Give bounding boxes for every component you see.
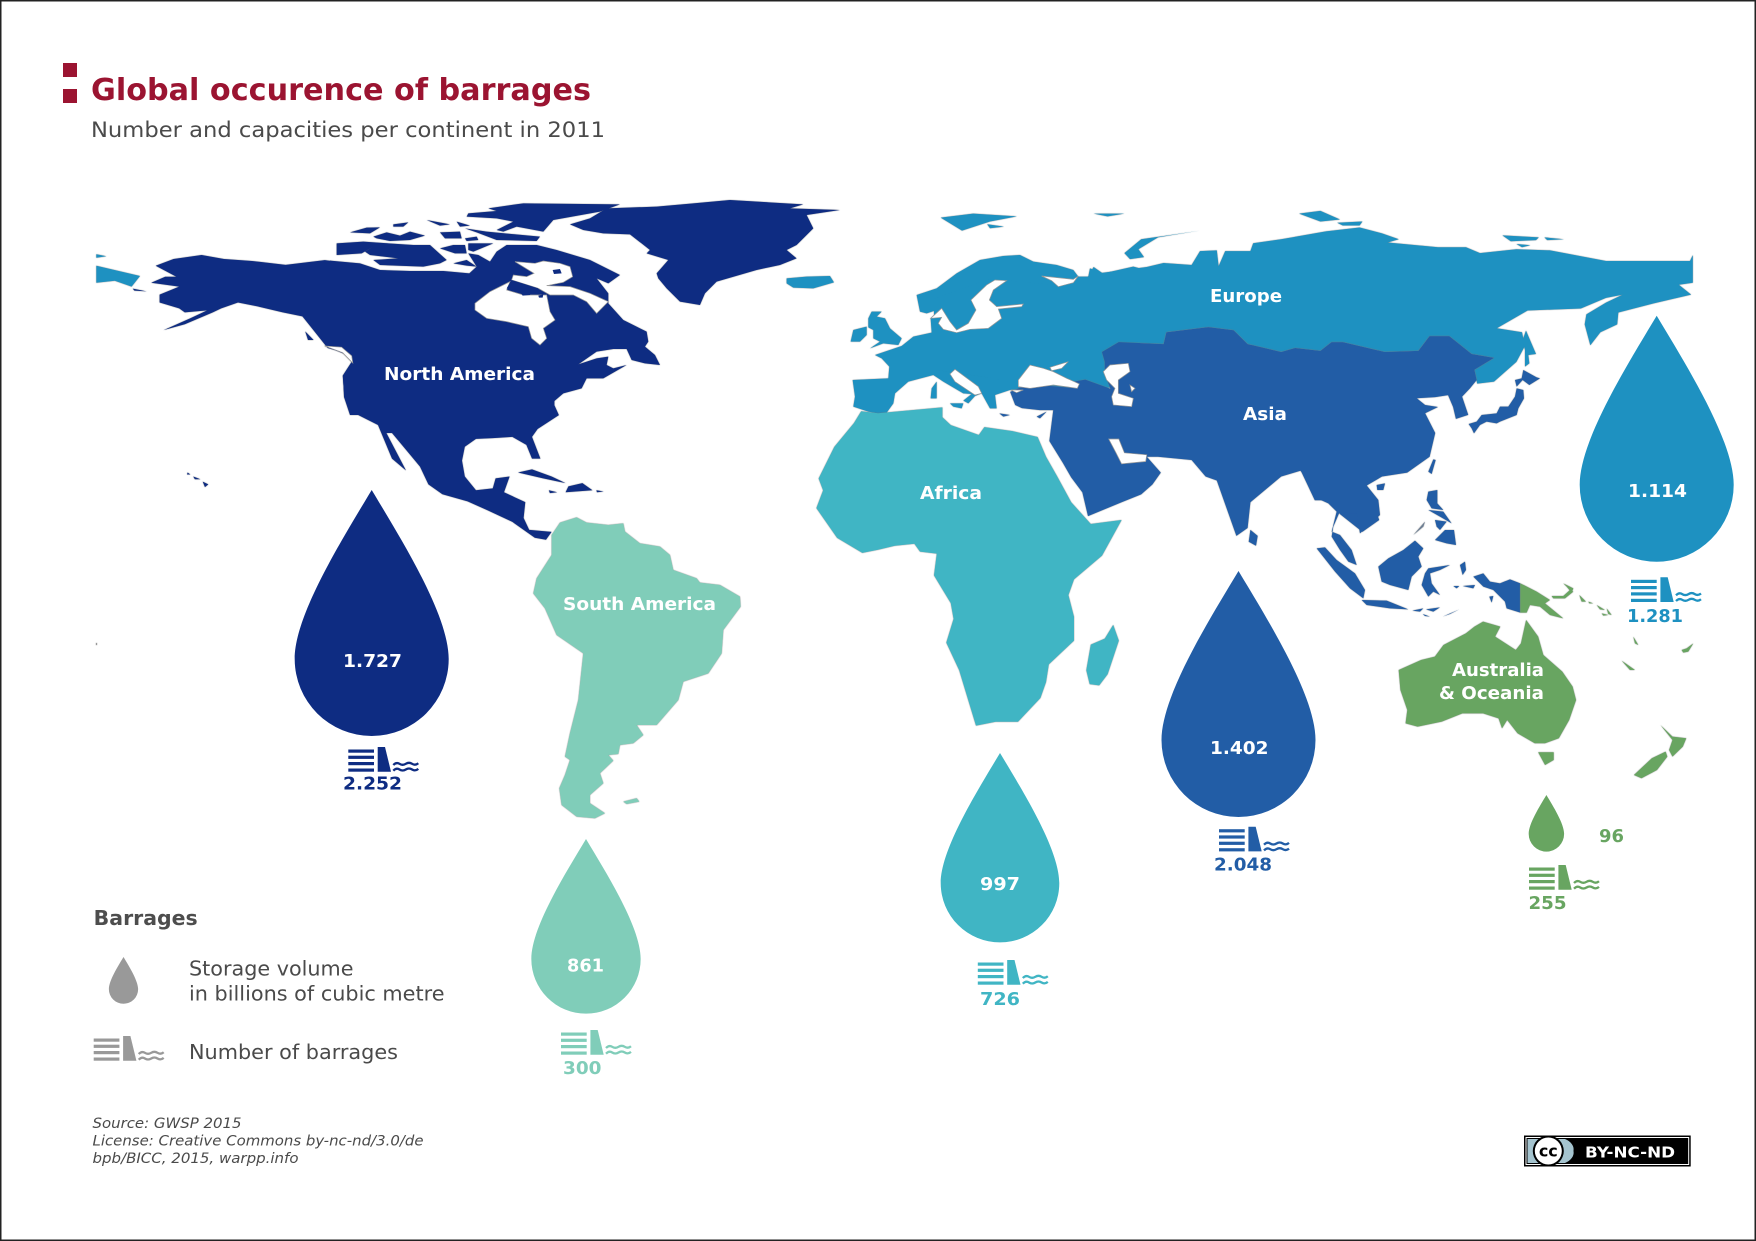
barrage count: Africa 726: 726 [980,989,1020,1010]
map: Asia [999,327,1540,617]
source and license: Source: GWSP 2015 [92,1116,242,1132]
map: inland seas [931,276,1147,464]
drop: Africa storage 997: 997 [980,874,1020,895]
barrage count: Europe 1.281: 1.281 [1627,606,1683,627]
drop: South America storage 861 [531,839,641,1014]
barrage count: North America 2.252: 2.252 [343,774,402,794]
legend text: number of barrages: Number of barrages [189,1040,398,1064]
label: Australia and Oceania: & Oceania [1439,683,1544,704]
label: South America: South America [563,594,716,615]
creative commons badge [1524,1136,1691,1166]
label: Australia and Oceania [1439,660,1544,704]
legend icon: storage drop [109,957,138,1004]
legend text: storage volume: in billions of cubic metre [189,982,444,1006]
drop: North America storage 1.727 [295,490,449,736]
source and license [92,1116,424,1167]
barrage count: South America 300: 300 [563,1058,602,1079]
label: Australia and Oceania: Australia [1452,660,1544,681]
drop: Africa storage 997 [941,753,1059,942]
label: Europe: Europe [1210,286,1282,307]
map: Africa [816,407,1122,726]
drop: Asia storage 1.402: 1.402 [1210,738,1268,759]
barrage count: Australia 255 [1528,865,1599,914]
drop: Europe storage 1.114: 1.114 [1628,481,1687,502]
source and license: bpb/BICC, 2015, warpp.info [92,1151,299,1167]
creative commons badge: BY-NC-ND [1585,1143,1675,1161]
legend text: storage volume: Storage volume [189,957,354,981]
legend text: storage volume [189,957,444,1006]
subtitle: Number and capacities per continent in 2011 [91,118,605,143]
title marker [63,63,77,103]
drop: South America storage 861: 861 [567,956,604,976]
title: Global occurence of barrages [91,73,591,108]
barrage count: North America 2.252 [343,747,418,794]
map: Australia and Oceania [1399,583,1693,778]
barrage count: Africa 726 [978,960,1048,1010]
map: North America [96,200,840,645]
barrage count: South America 300 [561,1030,631,1079]
drop: Australia storage 96 [1529,795,1624,852]
map: Europe [96,211,1693,415]
legend icon: barrage [94,1036,164,1061]
barrage count: Australia 255: 255 [1528,893,1566,914]
drop: North America storage 1.727: 1.727 [343,651,402,672]
drop: Europe storage 1.114 [1580,316,1734,562]
map: South America [533,517,741,818]
barrage count: Asia 2.048 [1214,827,1289,876]
barrage count: Asia 2.048: 2.048 [1214,854,1272,876]
legend [94,906,444,1064]
barrage count: Europe 1.281 [1627,577,1701,627]
label: Asia: Asia [1243,404,1287,425]
creative commons badge: cc [1539,1142,1558,1160]
drop: Asia storage 1.402 [1162,571,1316,817]
label: Africa: Africa [920,483,982,504]
drop: Australia storage 96: 96 [1599,826,1624,847]
legend heading: Barrages [94,906,198,930]
source and license: License: Creative Commons by-nc-nd/3.0/de [92,1134,424,1150]
label: North America: North America [384,364,535,385]
